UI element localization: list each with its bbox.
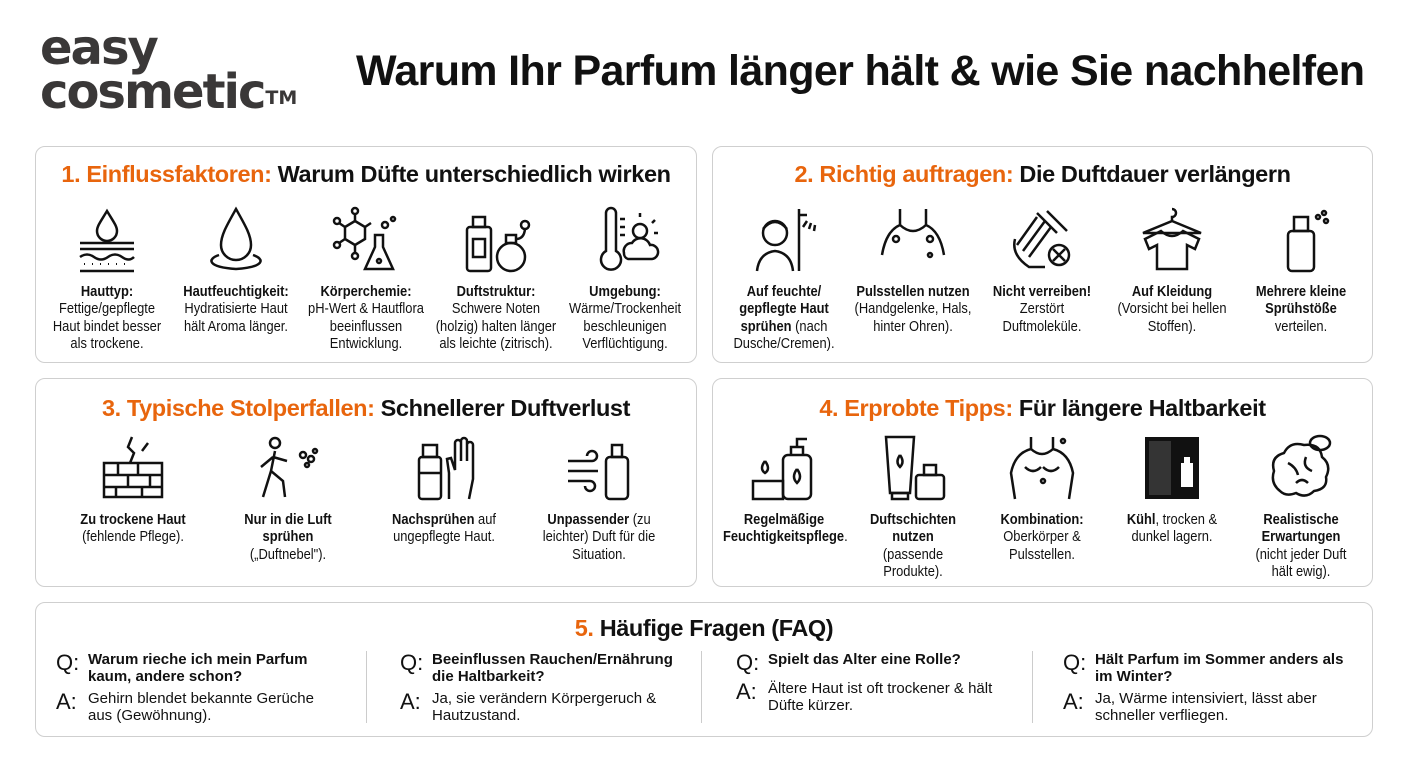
- items 4: Erwartungen: [1262, 528, 1341, 545]
- items 1: Wärme/Trockenheit beschleunigen Verflüchtigung.: [569, 300, 681, 352]
- logo: [40, 20, 297, 120]
- faq 4: Ja, Wärme intensiviert, lässt aber: [1095, 690, 1317, 707]
- faq 3: Ältere Haut ist oft trockener & hält: [768, 680, 992, 697]
- heading 3: 3. Typische Stolperfallen: Schnellerer Duftverlust: [102, 395, 630, 421]
- panel: 4 Tipps: [712, 378, 1373, 587]
- items 4: [723, 434, 1347, 580]
- items 4: Oberkörper &: [1004, 528, 1081, 545]
- items 3: (fehlende Pflege).: [82, 528, 184, 545]
- items 4: Regelmäßige Feuchtigkeitspflege.: [723, 511, 847, 545]
- items 1: Fettige/gepflegte Haut bindet besser als trockene.: [53, 300, 161, 352]
- faq 4: Q:: [1063, 650, 1086, 675]
- faq 4: schneller verfliegen.: [1095, 707, 1228, 724]
- items 3: Nachsprühen auf ungepflegte Haut.: [392, 511, 496, 545]
- panel: 1 Einflussfaktoren: [35, 146, 697, 363]
- items 1: Körperchemie:: [320, 283, 412, 300]
- items 1: [53, 206, 681, 352]
- panel: 3 Stolperfallen: [35, 378, 697, 587]
- faq 1: aus (Gewöhnung).: [88, 707, 211, 724]
- items 1: Hauttyp:: [81, 283, 133, 300]
- items 3: [80, 436, 655, 563]
- items 2: [733, 208, 1346, 352]
- items 4: Realistische: [1264, 511, 1339, 528]
- faq 2: Ja, sie verändern Körpergeruch &: [432, 690, 656, 707]
- faq 2: Beeinflussen Rauchen/Ernährung: [432, 651, 673, 668]
- items 4: dunkel lagern.: [1131, 528, 1212, 545]
- items 4: Kombination:: [1001, 511, 1084, 528]
- faq 3: Spielt das Alter eine Rolle?: [768, 651, 961, 668]
- items 4: Kühl, trocken &: [1127, 511, 1217, 528]
- heading 4: 4. Erprobte Tipps: Für längere Haltbarkeit: [819, 395, 1266, 421]
- faq 1: kaum, andere schon?: [88, 668, 242, 685]
- items 1: Hydratisierte Haut hält Aroma länger.: [184, 300, 288, 335]
- faq 2: [400, 650, 673, 724]
- items 3: sprühen: [263, 528, 314, 545]
- items 4: Pulsstellen.: [1009, 546, 1075, 563]
- heading 2: 2. Richtig auftragen: Die Duftdauer verlängern: [794, 161, 1291, 187]
- logo: cosmeticTM: [40, 64, 297, 120]
- items 3: („Duftnebel").: [250, 546, 327, 563]
- items 4: (nicht jeder Duft: [1256, 546, 1347, 563]
- items 1: pH-Wert & Hautflora beeinflussen Entwicklung.: [308, 300, 424, 352]
- panel: 5 FAQ: [35, 602, 1373, 737]
- faq 3: Q:: [736, 650, 759, 675]
- faq 2: A:: [400, 689, 421, 714]
- faq 3: [736, 650, 992, 714]
- items 4: Produkte).: [883, 563, 943, 580]
- items 4: (passende: [883, 546, 943, 563]
- faq 4: Hält Parfum im Sommer anders als: [1095, 651, 1343, 668]
- items 2: Mehrere kleine Sprühstöße: [1256, 283, 1346, 317]
- items 2: Pulsstellen nutzen (Handgelenke, Hals, hinter Ohren).: [855, 283, 972, 335]
- items 2: Auf feuchte/ gepflegte Haut sprühen (nach Dusche/Cremen).: [733, 283, 834, 352]
- heading 5: 5. Häufige Fragen (FAQ): [575, 615, 833, 641]
- items 2: Auf Kleidung: [1132, 283, 1212, 300]
- faq 1: Gehirn blendet bekannte Gerüche: [88, 690, 314, 707]
- items 2: verteilen.: [1275, 318, 1327, 335]
- items 3: Zu trockene Haut: [80, 511, 186, 528]
- items 1: Schwere Noten (holzig) halten länger als leichte (zitrisch).: [435, 300, 556, 352]
- items 1: Umgebung:: [589, 283, 661, 300]
- faq 1: A:: [56, 689, 77, 714]
- items 2: Nicht verreiben!: [993, 283, 1092, 300]
- items 2: (Vorsicht bei hellen Stoffen).: [1117, 300, 1226, 335]
- faq 1: [56, 650, 314, 724]
- items 1: Hautfeuchtigkeit:: [184, 283, 289, 300]
- faq 4: [1063, 650, 1343, 724]
- items 3: Unpassender (zu leichter) Duft für die Situation.: [542, 511, 655, 563]
- faq 2: Hautzustand.: [432, 707, 520, 724]
- faq 2: Q:: [400, 650, 423, 675]
- items 4: hält ewig).: [1272, 563, 1331, 580]
- faq 3: Düfte kürzer.: [768, 697, 853, 714]
- faq 4: A:: [1063, 689, 1084, 714]
- items 1: Duftstruktur:: [456, 283, 535, 300]
- faq 1: Warum rieche ich mein Parfum: [88, 651, 308, 668]
- faq 2: die Haltbarkeit?: [432, 668, 545, 685]
- title: Warum Ihr Parfum länger hält & wie Sie nachhelfen: [356, 47, 1364, 95]
- faq 4: im Winter?: [1095, 668, 1172, 685]
- items 4: Duftschichten: [870, 511, 956, 528]
- items 3: Nur in die Luft: [245, 511, 332, 528]
- faq 3: A:: [736, 679, 757, 704]
- faq 1: Q:: [56, 650, 79, 675]
- panel: 2 Richtig auftragen: [712, 146, 1373, 363]
- items 4: nutzen: [892, 528, 934, 545]
- logo: easy: [40, 20, 157, 76]
- items 2: Zerstört Duftmoleküle.: [1003, 300, 1082, 335]
- heading 1: 1. Einflussfaktoren: Warum Düfte unterschiedlich wirken: [61, 161, 671, 187]
